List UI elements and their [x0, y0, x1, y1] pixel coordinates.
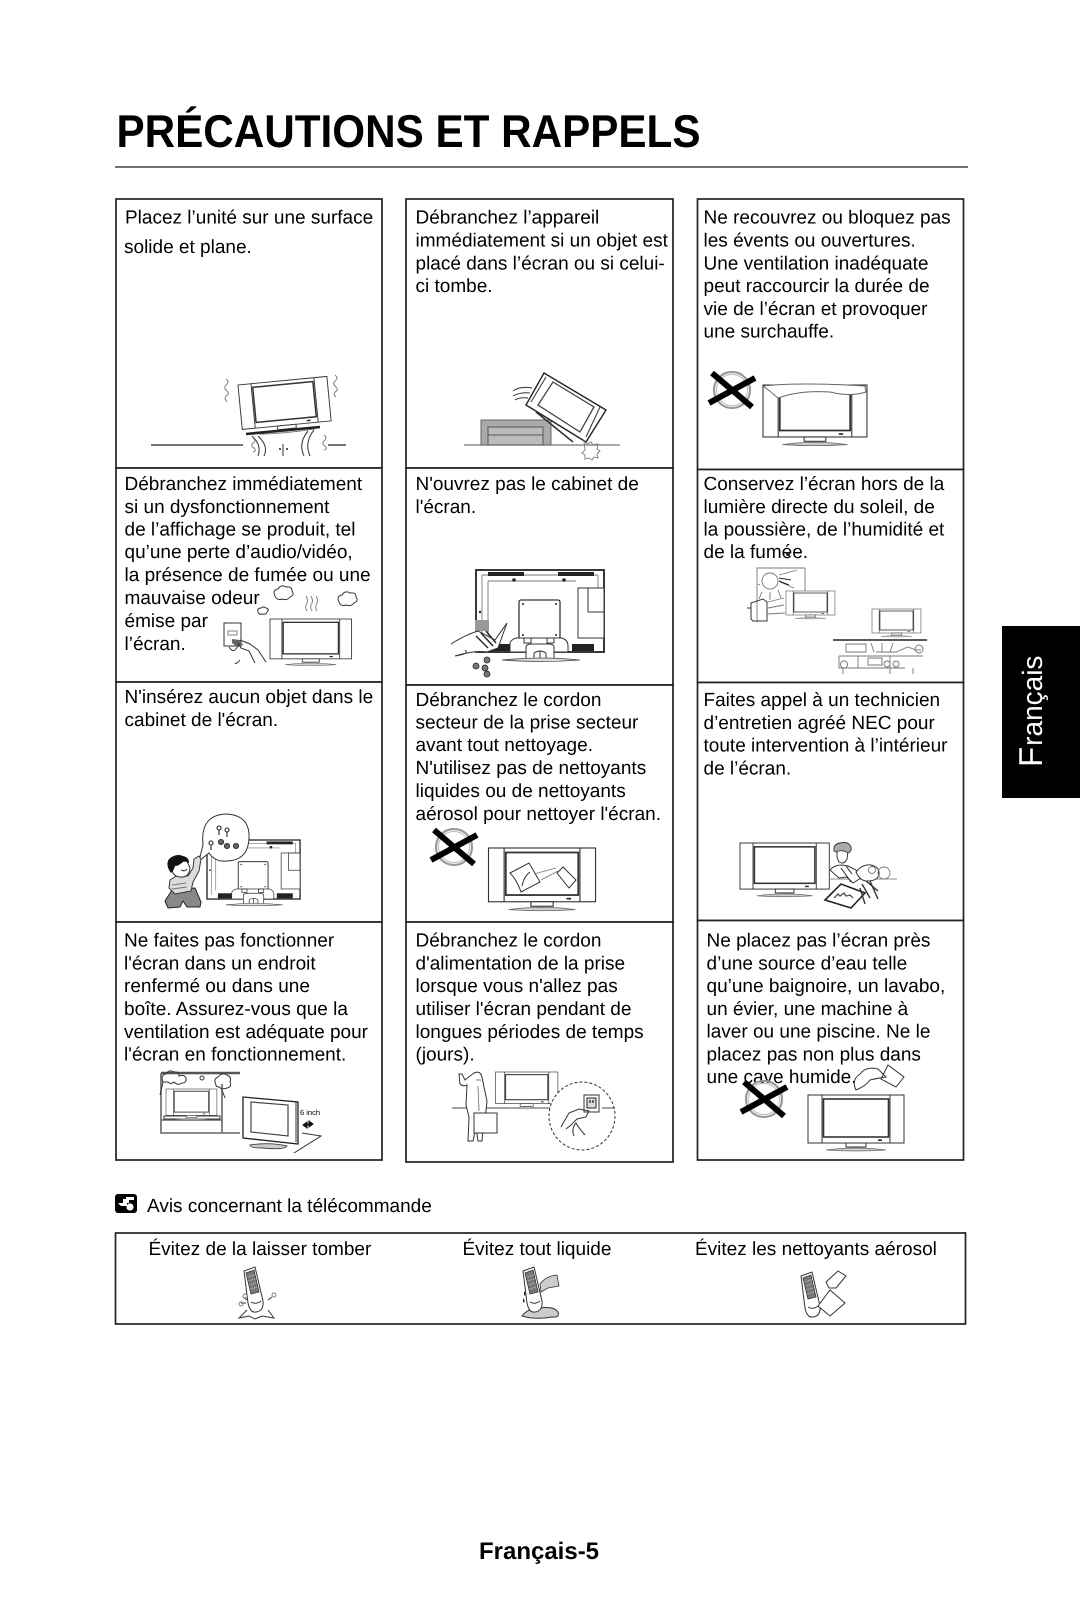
title: PRÉCAUTIONS ET RAPPELS	[116, 105, 700, 157]
text: cleaning: N'utilisez pas de nettoyants	[416, 758, 646, 779]
text: water: une cave humide.	[706, 1067, 856, 1088]
text: liquid warning: Évitez tout liquide	[462, 1238, 611, 1260]
text: surface plane: solide et plane.	[124, 237, 252, 258]
icon: tv	[808, 1095, 904, 1151]
icon: prohibition mark	[709, 372, 755, 408]
icon: tv in enclosure with smoke	[160, 1071, 240, 1133]
text: malfunction: émise par	[124, 611, 209, 632]
text: malfunction: si un dysfonctionnement	[124, 497, 330, 518]
text: cleaning: aérosol pour nettoyer l'écran.	[416, 804, 661, 825]
text: sunlight: lumière directe du soleil, de	[704, 497, 935, 518]
text: malfunction: Débranchez immédiatement	[124, 474, 363, 495]
panel: vents	[698, 199, 964, 470]
text: ventilation: l'écran en fonctionnement.	[124, 1044, 346, 1066]
text: cleaning: secteur de la prise secteur	[416, 712, 639, 734]
text: cleaning: avant tout nettoyage.	[416, 735, 593, 756]
text: water: d’une source d’eau telle	[706, 954, 907, 974]
text: ventilation: l'écran dans un endroit	[124, 954, 316, 974]
text: tv falls: placé dans l’écran ou si celui-	[416, 254, 665, 274]
panel: do not open cabinet	[406, 468, 673, 685]
panel: long absence	[406, 922, 673, 1162]
text: ventilation: Ne faites pas fonctionner	[124, 930, 335, 952]
text: technician: d’entretien agréé NEC pour	[704, 713, 935, 734]
icon: dropped remote	[239, 1267, 276, 1319]
icon: remote with aerosol and cloth	[801, 1271, 846, 1317]
text: long absence: Débranchez le cordon	[416, 930, 601, 952]
text: ventilation: ventilation est adéquate pour	[124, 1022, 369, 1043]
icon: tv and technician with tools	[740, 842, 897, 908]
panel: ventilation	[116, 922, 382, 1160]
panel: do not insert objects	[116, 682, 382, 922]
panel: cleaning	[406, 685, 673, 922]
icon: tv with cloth and spray	[488, 848, 596, 911]
page number: Français-5	[479, 1538, 599, 1565]
text: water: un évier, une machine à	[706, 999, 909, 1020]
panel: sunlight and dust	[698, 470, 964, 682]
icon: sun window and humidifier tv	[747, 552, 835, 622]
side tab: language	[1002, 626, 1080, 798]
icon: tv wobbling on unstable table	[151, 375, 346, 456]
icon: angled tv with six inch clearance: 6 inch	[300, 1108, 320, 1117]
icon: tv on table	[496, 1072, 558, 1109]
side tab: language: Français	[1012, 656, 1049, 767]
icon: tv falling from box	[464, 373, 620, 460]
icon: angled tv with six inch clearance	[243, 1097, 321, 1153]
icon: wet remote	[522, 1267, 559, 1318]
text: technician: Faites appel à un technicien	[704, 690, 940, 711]
text: malfunction: la présence de fumée ou une	[124, 565, 371, 586]
text: technician: toute intervention à l’intérieur	[704, 736, 948, 756]
panel: surface plane	[116, 199, 382, 468]
text: water: Ne placez pas l’écran près	[706, 930, 930, 952]
icon: smoking tv unplugged	[224, 586, 357, 665]
text: sunlight: de la fumée.	[704, 542, 808, 563]
icon: covered tv	[763, 384, 867, 446]
text: cleaning: Débranchez le cordon	[416, 690, 601, 711]
panel: remote control precautions	[116, 1233, 966, 1324]
text: water: placez pas non plus dans	[706, 1044, 921, 1066]
text: ventilation: boîte. Assurez-vous que la	[124, 999, 348, 1020]
panel: water	[698, 920, 964, 1160]
icon: prohibition mark	[741, 1081, 787, 1117]
icon: tv back	[207, 840, 300, 906]
text: do not open: l'écran.	[416, 497, 476, 518]
text: vents: vie de l’écran et provoquer	[704, 299, 928, 320]
text: tv falls: immédiatement si un objet est	[416, 230, 669, 252]
panel: technician	[698, 682, 964, 920]
text: do not insert: N'insérez aucun objet dans le	[124, 687, 373, 708]
panel: malfunction	[116, 468, 382, 682]
text: surface plane: Placez l’unité sur une surface	[125, 208, 373, 228]
text: aerosol warning: Évitez les nettoyants aérosol	[695, 1238, 937, 1260]
icon: hand pouring water	[854, 1065, 904, 1090]
text: water: laver ou une piscine. Ne le	[706, 1022, 930, 1042]
text: water: qu’une baignoire, un lavabo,	[706, 976, 945, 997]
text: drop warning: Évitez de la laisser tomber	[148, 1238, 372, 1260]
text: vents: peut raccourcir la durée de	[704, 276, 930, 297]
icon: prohibition mark	[431, 829, 477, 865]
text: malfunction: qu’une perte d’audio/vidéo,	[124, 542, 353, 563]
text: vents: les évents ou ouvertures.	[704, 230, 916, 252]
text: tv falls: Débranchez l’appareil	[416, 208, 599, 228]
icon: speech bubble with screws	[199, 814, 249, 861]
icon: tv back with hand and screws	[451, 570, 604, 677]
text: do not open: N'ouvrez pas le cabinet de	[416, 474, 639, 495]
text: long absence: d'alimentation de la prise	[416, 954, 625, 974]
text: malfunction: mauvaise odeur	[124, 588, 260, 609]
text: malfunction: l’écran.	[124, 634, 186, 655]
text: sunlight: Conservez l’écran hors de la	[704, 474, 945, 495]
text: technician: de l’écran.	[704, 758, 791, 780]
text: long absence: (jours).	[416, 1044, 475, 1066]
icon: woman leaving with briefcase	[452, 1072, 615, 1141]
text: malfunction: de l’affichage se produit, tel	[124, 520, 355, 540]
text: do not insert: cabinet de l'écran.	[124, 710, 278, 731]
text: vents: Ne recouvrez ou bloquez pas	[704, 208, 951, 228]
text: tv falls: ci tombe.	[416, 276, 493, 297]
text: long absence: lorsque vous n'allez pas	[416, 976, 618, 997]
text: long absence: longues périodes de temps	[416, 1022, 644, 1043]
text: vents: une surchauffe.	[704, 322, 834, 342]
text: cleaning: liquides ou de nettoyants	[416, 781, 626, 802]
icon: boy pointing	[165, 855, 201, 908]
icon: note hand	[115, 1194, 137, 1213]
text: ventilation: renfermé ou dans une	[124, 976, 310, 997]
panel: tv falls	[406, 199, 673, 468]
text: long absence: utiliser l'écran pendant de	[416, 999, 631, 1020]
text: vents: Une ventilation inadéquate	[704, 254, 929, 274]
text: sunlight: la poussière, de l’humidité et	[704, 520, 945, 540]
text: remote notice heading: Avis concernant la télécommande	[147, 1196, 432, 1217]
icon: unplugging inset	[549, 1082, 615, 1150]
icon: tv on stove shelf	[833, 609, 927, 674]
